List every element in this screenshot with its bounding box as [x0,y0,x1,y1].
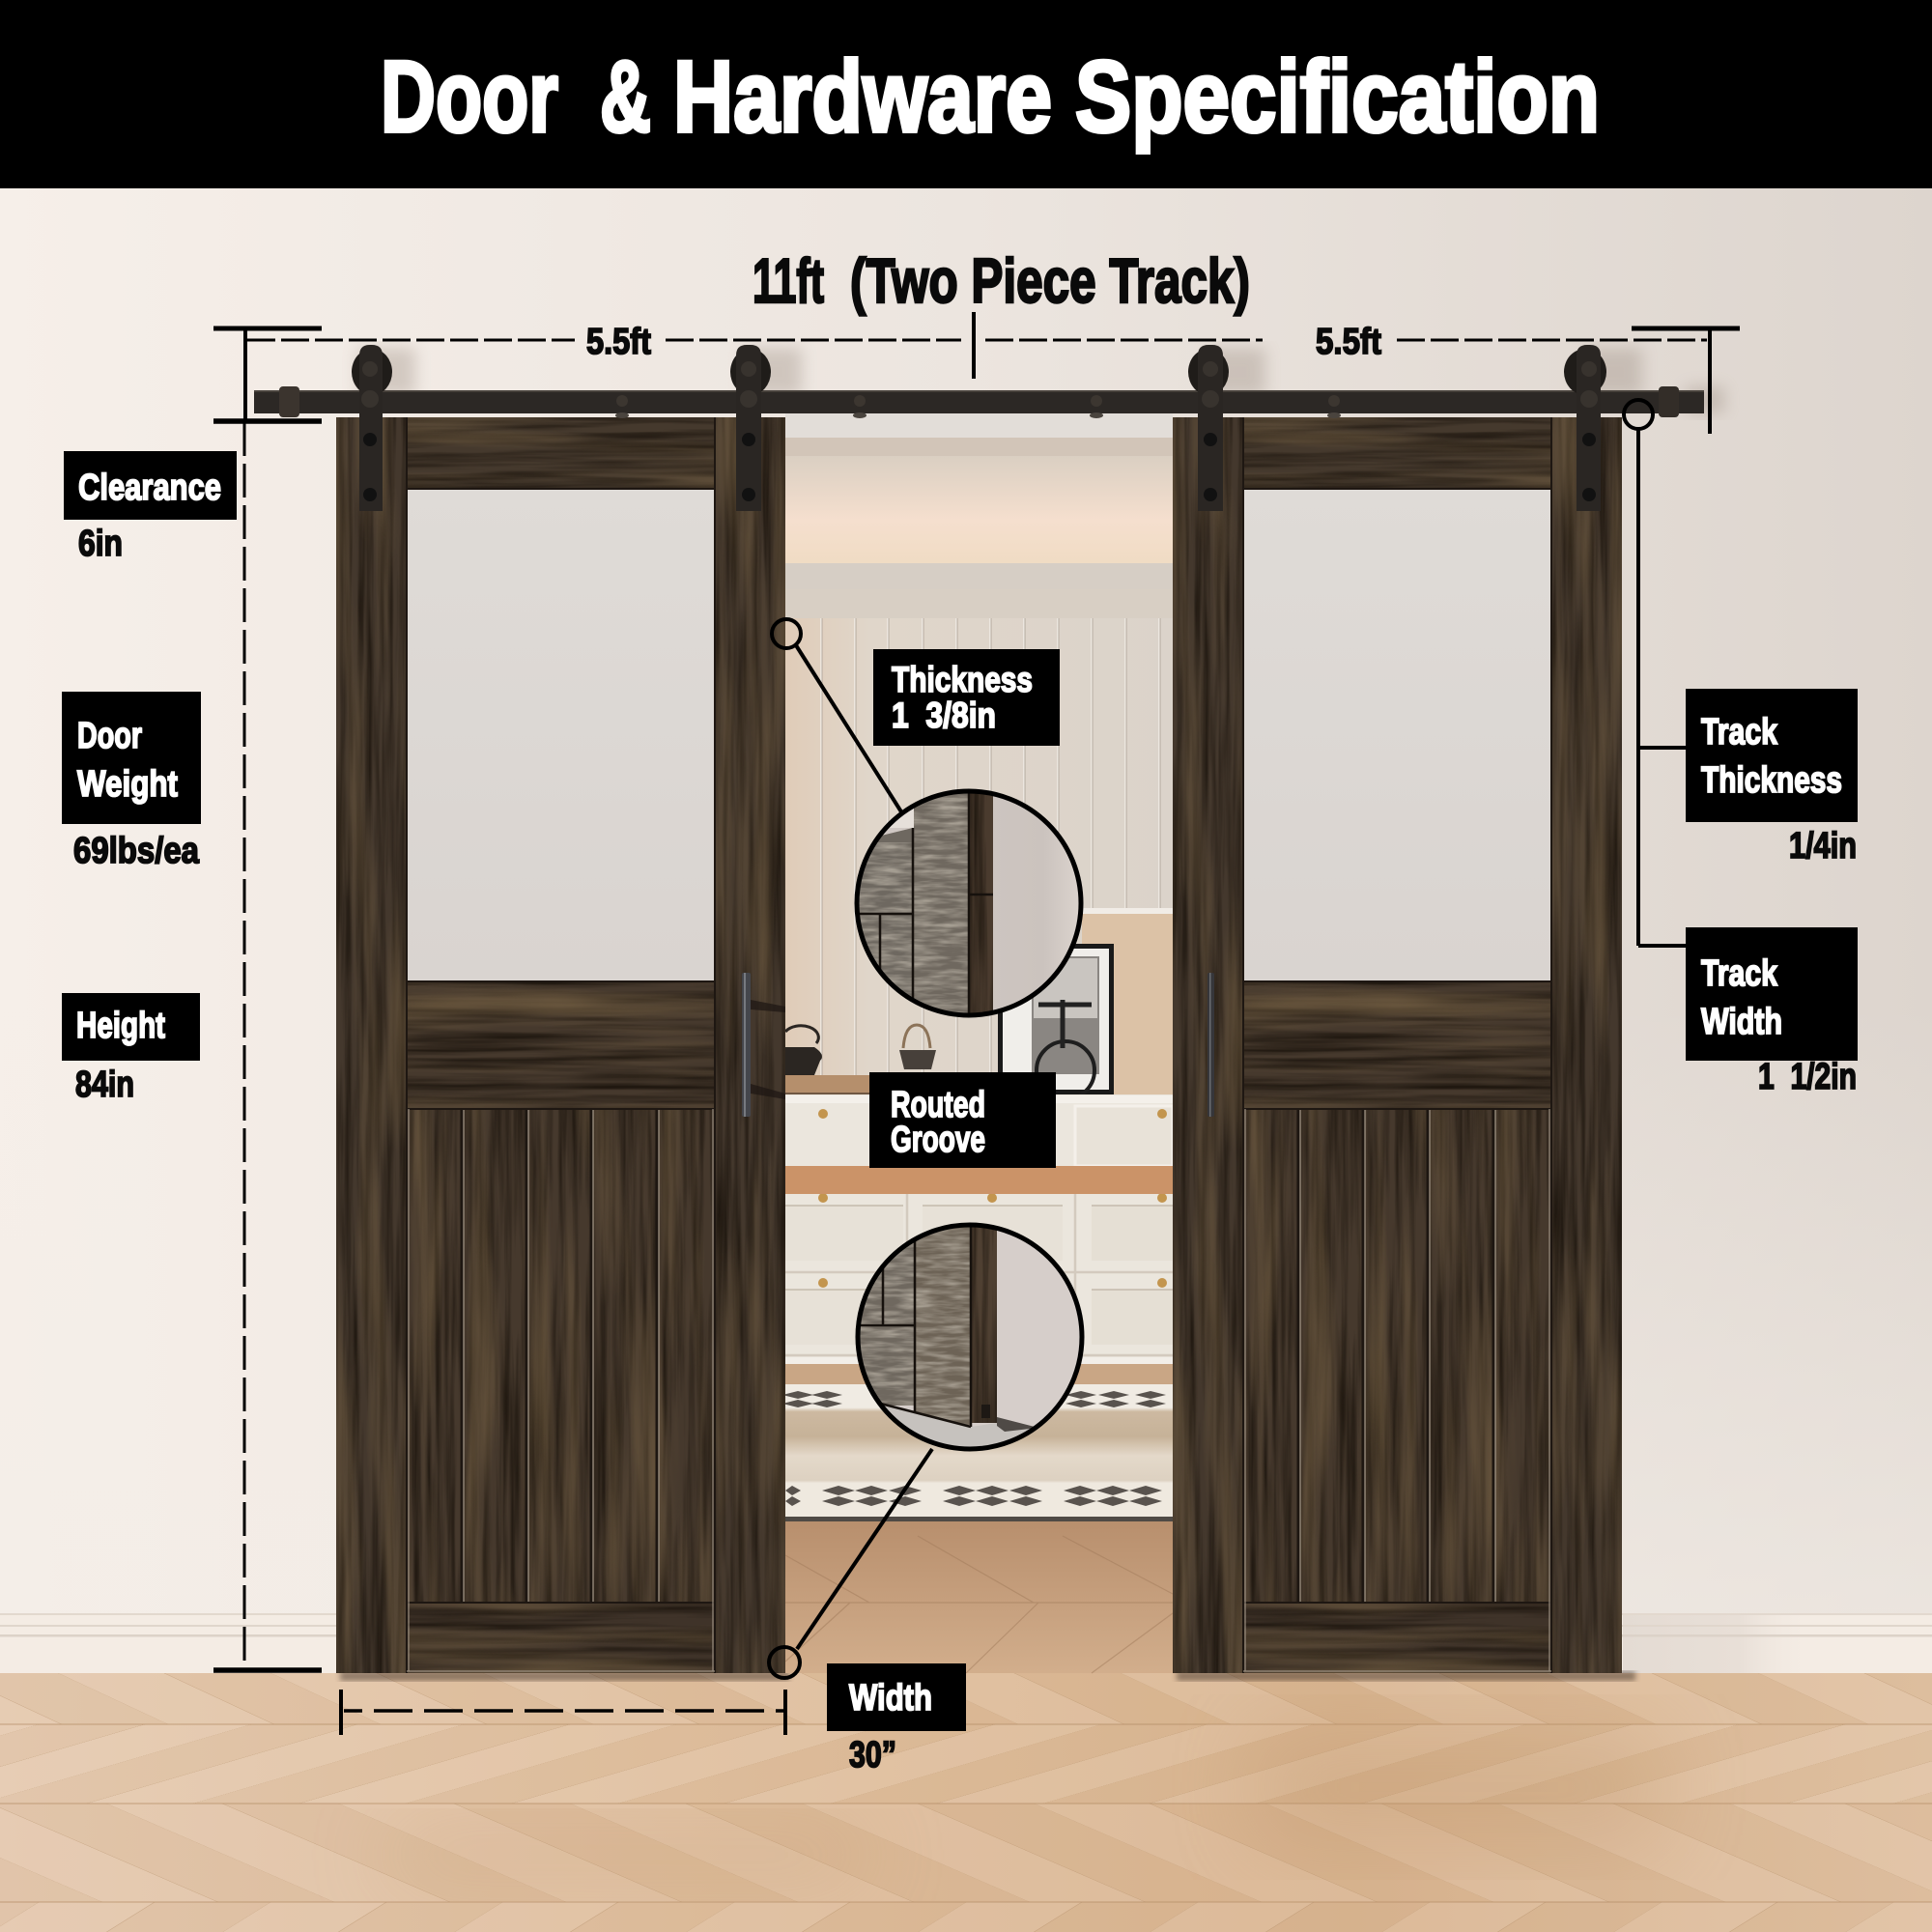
hanger 1 [352,345,392,511]
callout: track width: Width [1701,1002,1782,1042]
callout: door weight: Door [77,716,142,756]
callout: clearance: Clearance [78,468,221,508]
door weight value: 69lbs/ea [73,831,200,871]
right stile [715,417,785,1673]
title bar [0,0,1932,188]
right barn door [1173,417,1622,1673]
label: right half track: 5.5ft [1316,322,1381,362]
callout: routed groove [869,1072,1056,1168]
rug [782,1384,1173,1521]
top rail [407,417,715,489]
room seen through the doorway [782,413,1173,1673]
baseboard [0,1613,1932,1673]
callout: height: Height [76,1006,165,1046]
track length heading [753,245,1250,316]
callout: door weight [62,692,201,871]
callout: routed groove: Groove [891,1120,985,1160]
title: Specification [1075,41,1600,154]
callout: track thickness: Track [1701,712,1778,753]
door slab [336,417,785,1673]
cabinets [785,1094,1173,1364]
hanger 4 [1564,345,1606,511]
left barn door [336,417,785,1673]
near wood floor [785,1521,1173,1673]
hanger straps and wheels [352,345,1606,511]
distant floor [785,1364,1173,1385]
callout: thickness: Thickness [892,660,1033,699]
callout: height [62,993,200,1105]
plaster wall [1082,908,1173,1096]
wood floor [0,1673,1932,1932]
counter top shelf [785,1075,959,1095]
handle: left door [742,973,785,1117]
magnifier: routed groove [856,1223,1084,1451]
callout: track thickness: Thickness [1701,760,1842,801]
callout: clearance [64,451,237,564]
callout: track thickness [1686,689,1858,867]
bottom rail [407,1603,715,1673]
framed bicycle picture [998,944,1114,1099]
callout: routed groove: Routed [891,1085,985,1125]
barn door track [254,386,1704,418]
handle: right door [1208,973,1214,1117]
hanger 2 [730,345,771,511]
callout: track width: Track [1701,953,1778,994]
callout: door weight: Weight [77,764,178,805]
ceiling [785,413,1173,438]
title: & [600,41,651,154]
callout: thickness [873,649,1060,746]
dimension: track length [213,312,1740,434]
track length heading: 11ft [753,245,824,316]
door shadows on floor [340,1671,1635,1681]
label: left half track: 5.5ft [586,322,651,362]
leader line: routed groove [769,1449,932,1678]
callout: door width: Width [849,1678,932,1719]
leader line: thickness [772,619,902,813]
lock rail [407,981,715,1109]
track stoppers [279,386,299,417]
door width value: 30” [849,1735,896,1776]
track width value: 1 1/2in [1758,1057,1857,1097]
dimension: clearance and height [213,421,322,1670]
tea kettles [785,1025,936,1075]
soft wall shadow behind hardware [357,348,1724,413]
paneled wall [785,618,1173,1082]
rug diamonds [782,1391,1166,1506]
clearance value: 6in [78,524,123,564]
plank panel [407,1109,715,1603]
wall background [0,188,1932,1673]
title [381,41,1600,154]
glass lite [407,489,715,981]
track bolts [616,395,1340,407]
track length heading: (Two Piece Track) [850,245,1250,316]
wood counter [785,1166,1173,1194]
dimension: door width [341,1690,785,1735]
callout: thickness: 1 3/8in [892,696,996,735]
height value: 84in [75,1065,134,1105]
callout: door width [827,1663,966,1776]
magnifier: door thickness [854,788,1084,1018]
chevron bands [0,1673,1932,1724]
title: Door [381,41,558,154]
left stile [336,417,407,1673]
callout: track width [1686,927,1858,1097]
hanger 3 [1188,345,1229,511]
leader line: track [1624,400,1686,946]
title: Hardware [673,41,1052,154]
track thickness value: 1/4in [1789,826,1857,867]
